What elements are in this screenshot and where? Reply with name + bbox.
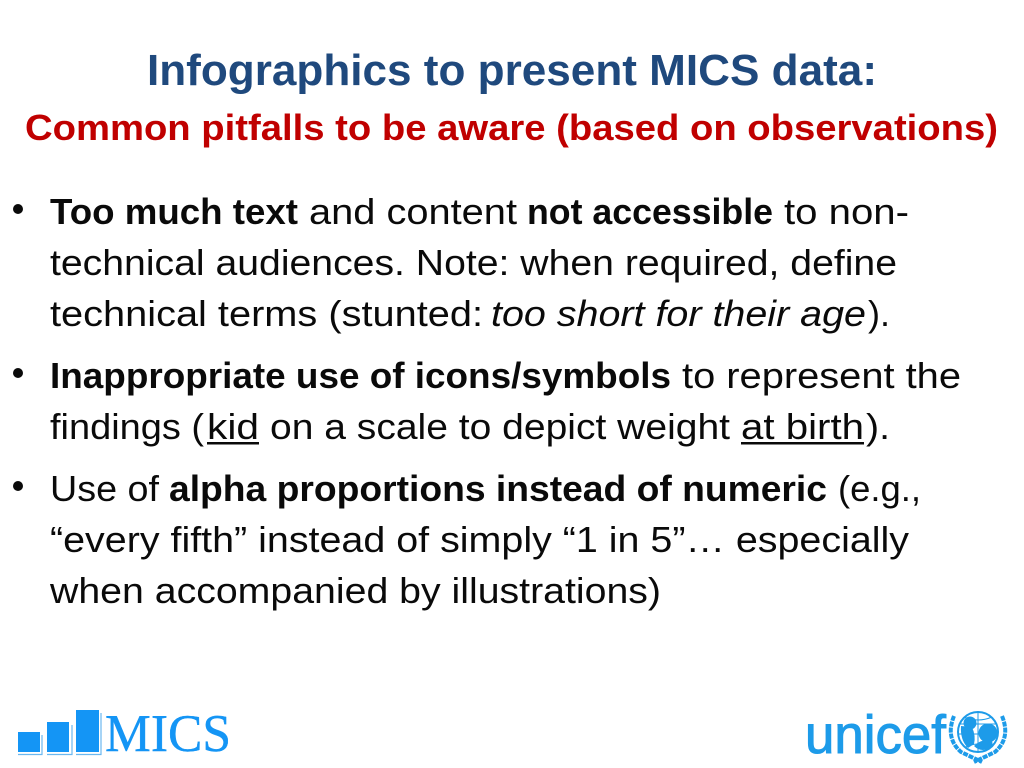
bullet 1: too much text: and content (309, 191, 517, 232)
bullet 1: too much text: too short for their age (491, 293, 866, 334)
logo: unicef: unicef (805, 705, 947, 765)
bullet 2: inappropriate icons: at birth (741, 406, 864, 447)
bullet 1: too much text: Too much text (50, 191, 298, 232)
bullet 1: too much text: not accessible (527, 191, 773, 232)
bullet 1: too much text: to non- (784, 191, 909, 232)
bullet 2: inappropriate icons (13, 355, 961, 447)
bullet 2: inappropriate icons: on a scale to depict weight (270, 406, 730, 447)
bullet 3: alpha proportions: “every fifth” instead of simply “1 in 5”… especially (50, 519, 909, 560)
logo: MICS: MICS (105, 705, 231, 763)
bullet 3: alpha proportions: alpha proportions instead of numeric (169, 468, 827, 509)
bullet 1: too much text (13, 191, 909, 334)
bullet 2: inappropriate icons: ). (866, 406, 890, 447)
bullet 2: inappropriate icons: kid (207, 406, 259, 447)
bullet 3: alpha proportions: when accompanied by illustrations) (49, 570, 661, 611)
bullet 3: alpha proportions: (e.g., (838, 468, 921, 509)
bullet 2: inappropriate icons: to represent the (682, 355, 961, 396)
bullet 2: inappropriate icons: findings ( (50, 406, 204, 447)
logo: MICS (18, 705, 231, 763)
bullet 1: too much text: technical terms (stunted: (50, 293, 483, 334)
bullet 1: too much text: technical audiences. Note: when required, define (50, 242, 897, 283)
subtitle: Common pitfalls to be aware (based on observations) (25, 107, 998, 148)
title: Infographics to present MICS data: (147, 46, 877, 95)
bullet 3: alpha proportions (13, 468, 921, 611)
icon: unicef emblem (951, 712, 1005, 762)
bullet 3: alpha proportions: Use of (50, 468, 160, 509)
bullet 1: too much text: ). (868, 293, 890, 334)
bullet 2: inappropriate icons: Inappropriate use of icons/symbols (50, 355, 671, 396)
